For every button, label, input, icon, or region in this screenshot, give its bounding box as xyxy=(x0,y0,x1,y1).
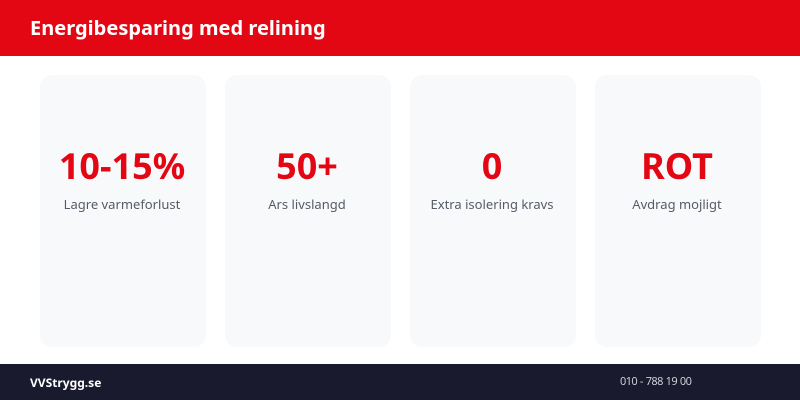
stat label: Ars livslangd xyxy=(268,195,346,213)
footer bar xyxy=(0,364,800,400)
footer phone: 010 - 788 19 00 xyxy=(620,374,691,389)
stat value: ROT xyxy=(641,141,713,190)
header banner xyxy=(0,0,800,56)
panel: 10-15% xyxy=(40,75,206,346)
stat label: Avdrag mojligt xyxy=(632,195,722,213)
stat label: Extra isolering kravs xyxy=(430,195,554,213)
title: Energibesparing med relining xyxy=(30,14,326,41)
stat value: 50+ xyxy=(276,141,338,190)
panel: ROT xyxy=(595,75,761,346)
stat label: Lagre varmeforlust xyxy=(64,195,180,213)
panel: 0 xyxy=(410,75,576,346)
panel: 50+ xyxy=(225,75,391,346)
stat value: 10-15% xyxy=(59,141,185,190)
stat value: 0 xyxy=(482,141,502,190)
footer brand: VVStrygg.se xyxy=(30,374,101,391)
